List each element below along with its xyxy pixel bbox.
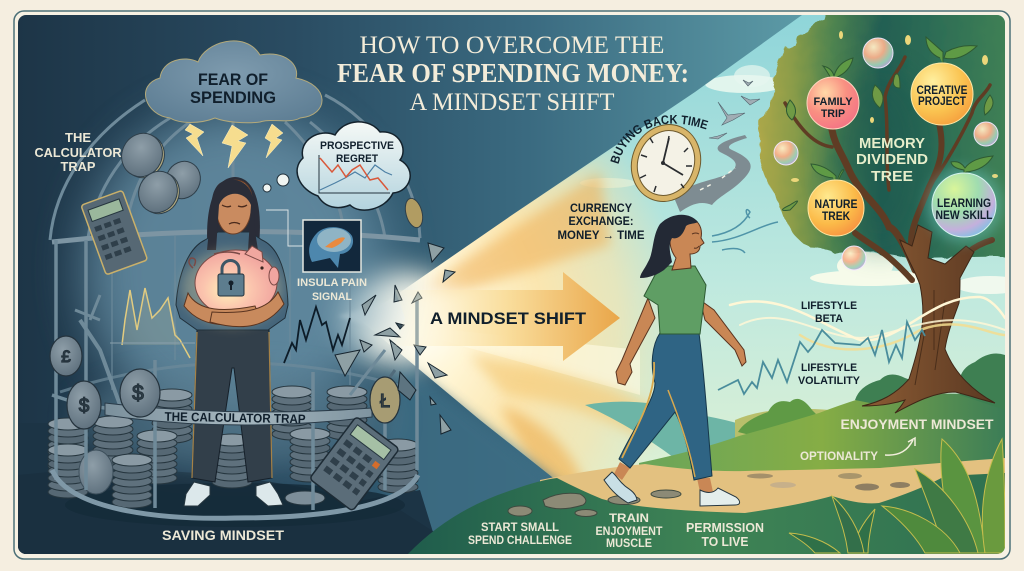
walker ankles <box>614 462 713 492</box>
fear of spending cloud <box>146 41 322 123</box>
fruit creative project: CREATIVE <box>916 85 968 97</box>
calculator trap label: THE <box>65 130 91 145</box>
walker shoes <box>604 472 740 506</box>
currency exchange label: EXCHANGE: <box>568 216 634 228</box>
fruit creative project: PROJECT <box>918 96 966 108</box>
fruit creative project <box>911 37 977 125</box>
insula pain label: SIGNAL <box>312 291 352 303</box>
calculator trap label <box>35 133 122 171</box>
fear of spending cloud: SPENDING <box>190 88 276 107</box>
lightning bolts <box>185 124 283 168</box>
fear of spending cloud: FEAR OF <box>198 70 268 89</box>
main title: FEAR OF SPENDING MONEY: <box>337 58 689 88</box>
fruit nature trek <box>808 164 864 236</box>
jagged dark chart line <box>284 307 350 363</box>
lifestyle beta label: LIFESTYLE <box>801 300 857 312</box>
walker head <box>670 218 704 270</box>
fruit nature trek: TREK <box>822 211 851 223</box>
optionality label and arrow <box>800 438 915 463</box>
lifestyle volatility label: VOLATILITY <box>798 375 861 387</box>
walker hair <box>640 215 698 278</box>
saver hair back <box>207 177 260 238</box>
floor shadow under cage <box>176 483 405 510</box>
thought bubble prospective regret: PROSPECTIVE <box>320 140 394 152</box>
fruit family trip <box>807 58 859 129</box>
memory dividend tree label <box>856 135 928 185</box>
coin stacks <box>48 386 418 508</box>
saving mindset label: SAVING MINDSET <box>162 527 284 543</box>
large dollar and pound coins <box>50 336 400 429</box>
dark left side background <box>18 15 802 555</box>
wind lines <box>712 210 778 253</box>
training steps labels: START SMALL <box>481 522 559 534</box>
upper calculator <box>81 190 148 275</box>
walking woman <box>604 215 746 506</box>
currency exchange label: CURRENCY <box>570 203 632 215</box>
memory dividend tree label: TREE <box>871 168 913 185</box>
floating coins <box>115 127 426 230</box>
distant hills <box>585 394 1005 480</box>
fruit learning new skill: LEARNING <box>937 198 991 210</box>
flying birds <box>709 80 760 139</box>
currency exchange label: MONEY → TIME <box>558 230 645 242</box>
walker trousers <box>619 333 712 480</box>
main title <box>337 32 689 116</box>
winding road behind clock <box>675 135 751 212</box>
light beam <box>400 148 660 478</box>
fruit learning new skill: NEW SKILL <box>936 210 992 222</box>
training steps labels: ENJOYMENT <box>596 526 662 538</box>
person holding piggy bank <box>176 177 288 506</box>
fruit family trip: TRIP <box>821 108 845 120</box>
saver sweater <box>176 232 288 330</box>
saver arms <box>184 292 284 327</box>
training steps labels: TO LIVE <box>702 535 748 549</box>
fruit family trip: FAMILY <box>814 96 853 108</box>
front broken cage bars <box>52 240 418 518</box>
training steps labels: SPEND CHALLENGE <box>468 535 572 547</box>
glow inside cage <box>75 110 395 470</box>
large dollar and pound coins: Ł <box>380 391 390 411</box>
spiked chart behind person <box>110 288 195 358</box>
regret mini chart <box>319 155 392 193</box>
lifestyle volatility chart <box>718 322 925 394</box>
insula brain scan <box>303 220 361 272</box>
piggy bank <box>182 246 282 326</box>
saver face <box>215 180 252 234</box>
walker arms <box>616 298 655 385</box>
training steps labels <box>468 513 764 550</box>
training steps labels: TRAIN <box>609 513 649 525</box>
large dollar and pound coins: £ <box>61 347 71 366</box>
thought bubble prospective regret <box>263 122 410 210</box>
memory dividend tree label: DIVIDEND <box>856 151 928 168</box>
calculator trap ribbon: THE CALCULATOR TRAP <box>164 410 306 426</box>
calculator trap ribbon <box>105 403 372 426</box>
calculator trap label: CALCULATOR <box>34 145 122 160</box>
lifestyle beta label: BETA <box>815 313 843 325</box>
insula pain label: INSULA PAIN <box>297 277 367 289</box>
lower calculator <box>309 416 399 511</box>
lifestyle volatility label: LIFESTYLE <box>801 362 857 374</box>
main title: HOW TO OVERCOME THE <box>360 32 664 59</box>
clock <box>621 115 711 211</box>
large dollar and pound coins: $ <box>132 382 144 405</box>
lifestyle beta label <box>801 300 857 325</box>
sky background <box>526 15 1005 472</box>
birdcage rear structure <box>50 95 420 392</box>
main title: A MINDSET SHIFT <box>410 89 614 116</box>
insula pain label <box>298 278 366 300</box>
optionality label and arrow: OPTIONALITY <box>800 449 878 463</box>
thought bubble prospective regret: REGRET <box>336 153 378 165</box>
glass shards <box>335 243 455 434</box>
walker shirt <box>644 266 706 334</box>
stepping stones <box>508 490 681 516</box>
mindset shift arrow: A MINDSET SHIFT <box>430 309 587 328</box>
saver shoes <box>184 482 283 506</box>
fruit nature trek: NATURE <box>814 199 858 211</box>
iridescent bubbles <box>774 38 998 270</box>
flowing lifestyle wave <box>730 297 1005 349</box>
currency exchange label <box>558 203 645 242</box>
calculator trap label: TRAP <box>60 159 96 174</box>
walker smile and eye <box>692 233 699 248</box>
large dollar and pound coins: $ <box>79 396 90 417</box>
training steps labels: MUSCLE <box>606 538 652 550</box>
memory dividend tree label: MEMORY <box>859 135 925 152</box>
saver legs <box>192 330 272 482</box>
insula connector line <box>266 210 303 246</box>
lifestyle volatility label <box>798 362 861 387</box>
beam origin glow <box>338 272 462 364</box>
ground lower plants <box>789 439 1005 553</box>
enjoyment mindset label: ENJOYMENT MINDSET <box>840 416 994 432</box>
path and grass foreground <box>407 458 1005 555</box>
padlock <box>218 260 244 296</box>
training steps labels: PERMISSION <box>686 521 764 535</box>
tree trunk and branches <box>782 57 995 413</box>
tree canopy <box>758 0 1024 258</box>
bushes <box>855 354 1005 403</box>
fruit learning new skill <box>926 156 1002 243</box>
mindset shift arrow <box>395 272 620 361</box>
buying back time curved label: BUYING BACK TIME <box>610 115 708 164</box>
